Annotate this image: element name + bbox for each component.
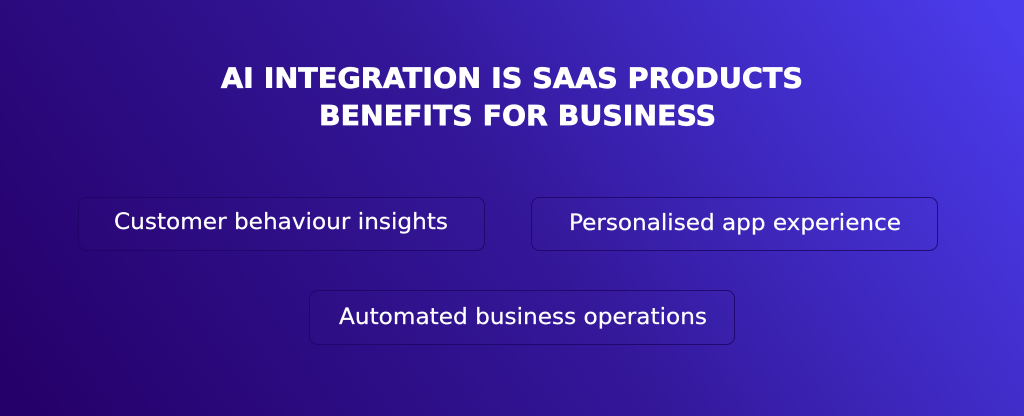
card: customer behaviour insights: Customer behaviour insights <box>114 209 448 235</box>
card: personalised app experience <box>532 198 938 250</box>
card: automated business operations <box>310 290 734 344</box>
title: BENEFITS FOR BUSINESS <box>319 99 716 132</box>
card: personalised app experience: Personalised app experience <box>569 210 901 236</box>
card: automated business operations: Automated business operations <box>339 304 707 330</box>
title <box>221 62 803 132</box>
title: AI INTEGRATION IS SAAS PRODUCTS <box>221 62 803 94</box>
card: customer behaviour insights <box>78 198 484 250</box>
